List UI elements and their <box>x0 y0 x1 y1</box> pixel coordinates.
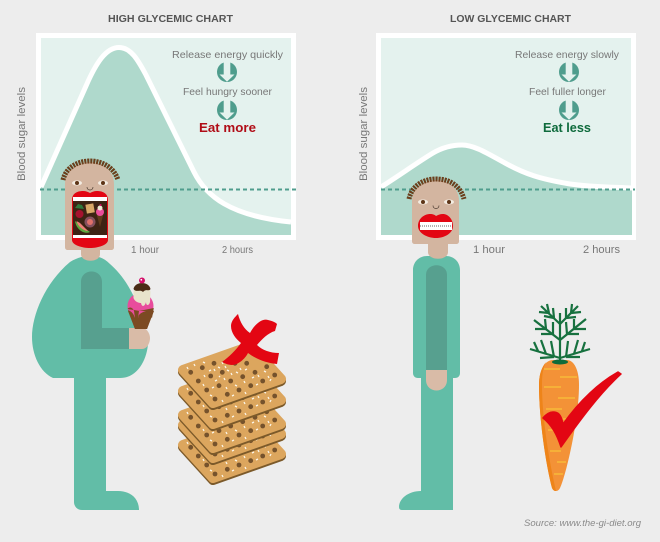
icon: down arrow 2 left <box>217 100 237 120</box>
arm <box>426 265 447 371</box>
axis label: 1 hour right: 1 hour <box>473 244 505 256</box>
carrot body <box>539 360 579 491</box>
figure: large man <box>32 161 154 510</box>
nose <box>433 206 439 208</box>
icon: down arrow 1 right <box>559 62 579 82</box>
body and legs <box>399 256 460 510</box>
text: feel hungry sooner: Feel hungry sooner <box>183 86 272 98</box>
neck <box>428 240 448 259</box>
carrot <box>530 304 590 491</box>
text: eat less: Eat less <box>543 120 591 135</box>
head <box>65 162 114 250</box>
icon: red check mark <box>543 372 621 447</box>
icon: down arrow 1 left <box>217 62 237 82</box>
body <box>32 256 148 510</box>
text: release energy quickly: Release energy quickly <box>172 49 284 61</box>
hair <box>409 179 464 199</box>
hair <box>63 161 118 180</box>
crackers stack <box>183 346 281 480</box>
arm <box>81 272 130 349</box>
ice cream <box>128 278 154 329</box>
text: feel fuller longer: Feel fuller longer <box>529 86 606 98</box>
title: low glycemic chart: LOW GLYCEMIC CHART <box>450 13 572 25</box>
open mouth with food <box>72 191 108 248</box>
hand <box>426 370 447 390</box>
title: high glycemic chart: HIGH GLYCEMIC CHART <box>108 13 234 25</box>
neck <box>81 245 100 261</box>
figure: slim man <box>399 179 464 510</box>
text: release energy slowly: Release energy slowly <box>515 49 620 61</box>
icon: down arrow 2 right <box>559 100 579 120</box>
eyes <box>72 180 108 186</box>
text: eat more: Eat more <box>199 120 256 135</box>
closed mouth with teeth <box>418 214 453 238</box>
carrot stripes <box>544 369 577 474</box>
chart: low glycemic curve <box>378 36 635 238</box>
axis label: 2 hours left: 2 hours <box>222 245 253 256</box>
chart: high glycemic curve <box>38 36 296 238</box>
source note: Source: www.the-gi-diet.org <box>524 518 641 528</box>
axis label: 1 hour left: 1 hour <box>131 245 160 256</box>
eyes <box>418 200 454 204</box>
nose <box>87 187 93 190</box>
axis label: blood sugar levels right: Blood sugar levels <box>358 86 370 181</box>
carrot leaves <box>530 304 590 360</box>
hand <box>129 328 150 349</box>
head <box>412 180 459 244</box>
axis label: blood sugar levels left: Blood sugar levels <box>16 86 28 181</box>
icon: red cross <box>222 314 279 365</box>
axis label: 2 hours right: 2 hours <box>583 244 620 256</box>
